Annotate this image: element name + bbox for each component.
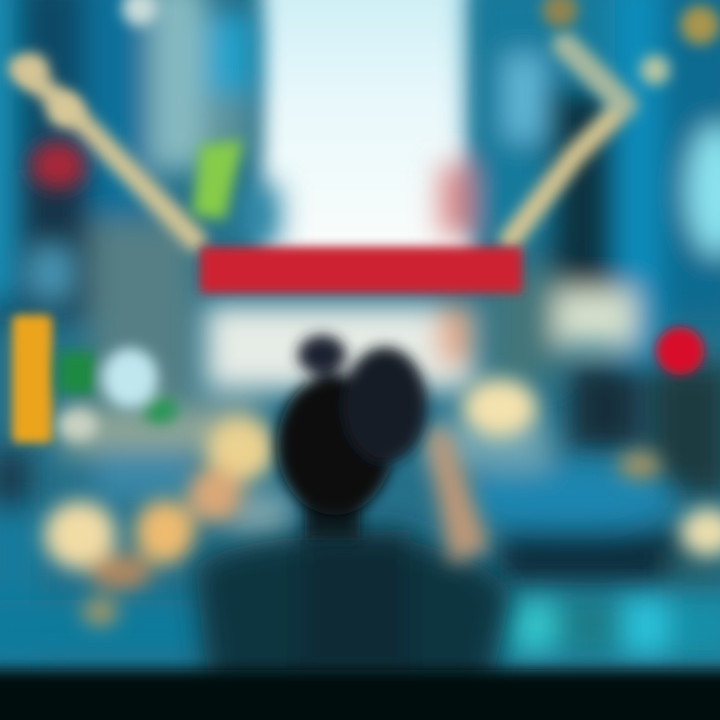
head and hair xyxy=(277,335,427,515)
mid-street haze xyxy=(60,305,475,540)
raised arm xyxy=(425,430,490,565)
sky xyxy=(262,0,474,260)
person xyxy=(195,335,512,690)
green sign xyxy=(192,140,243,220)
bottom dark band xyxy=(0,670,720,720)
rope knots and lights xyxy=(15,0,720,128)
bottom teal band xyxy=(0,595,720,660)
banner ropes xyxy=(20,45,625,240)
red light xyxy=(656,327,704,375)
lower street blue xyxy=(0,420,720,660)
left buildings xyxy=(0,0,280,410)
yellow sign xyxy=(12,315,52,443)
green and white signs xyxy=(58,348,178,441)
shoulders and torso xyxy=(195,530,512,690)
right buildings xyxy=(440,0,720,495)
red banner xyxy=(200,247,522,293)
red sign left xyxy=(30,141,86,189)
neck xyxy=(305,480,360,540)
golden lights xyxy=(44,378,720,626)
